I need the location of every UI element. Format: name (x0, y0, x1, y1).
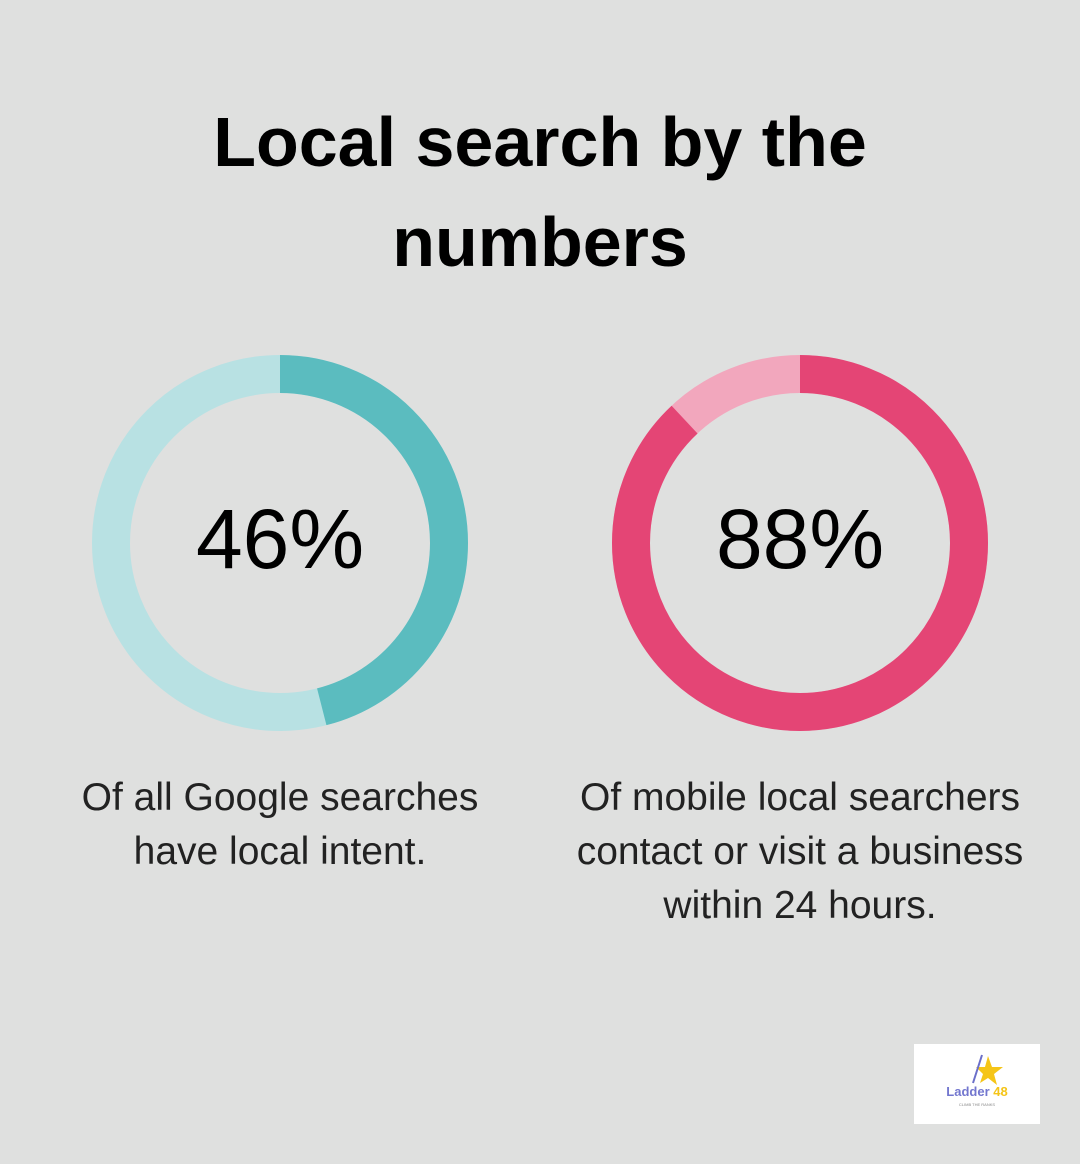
logo: Ladder 48 (946, 1084, 1008, 1099)
logo: CLIMB THE RANKS (959, 1102, 995, 1107)
label 2 (577, 776, 1023, 927)
donut 1 (111, 374, 449, 712)
label 2: contact or visit a business (577, 830, 1023, 873)
logo icon (972, 1054, 1003, 1085)
logo (914, 1044, 1040, 1124)
title: numbers (392, 203, 688, 281)
label 2: Of mobile local searchers (580, 776, 1020, 819)
number 88%: 88% (716, 492, 884, 586)
label 1: Of all Google searches (82, 776, 478, 819)
title: Local search by the (213, 103, 867, 181)
label 1 (82, 776, 478, 873)
number 46%: 46% (196, 492, 364, 586)
donut 2 (631, 374, 969, 712)
label 1: have local intent. (134, 830, 426, 873)
label 2: within 24 hours. (663, 884, 937, 927)
title (213, 103, 867, 281)
